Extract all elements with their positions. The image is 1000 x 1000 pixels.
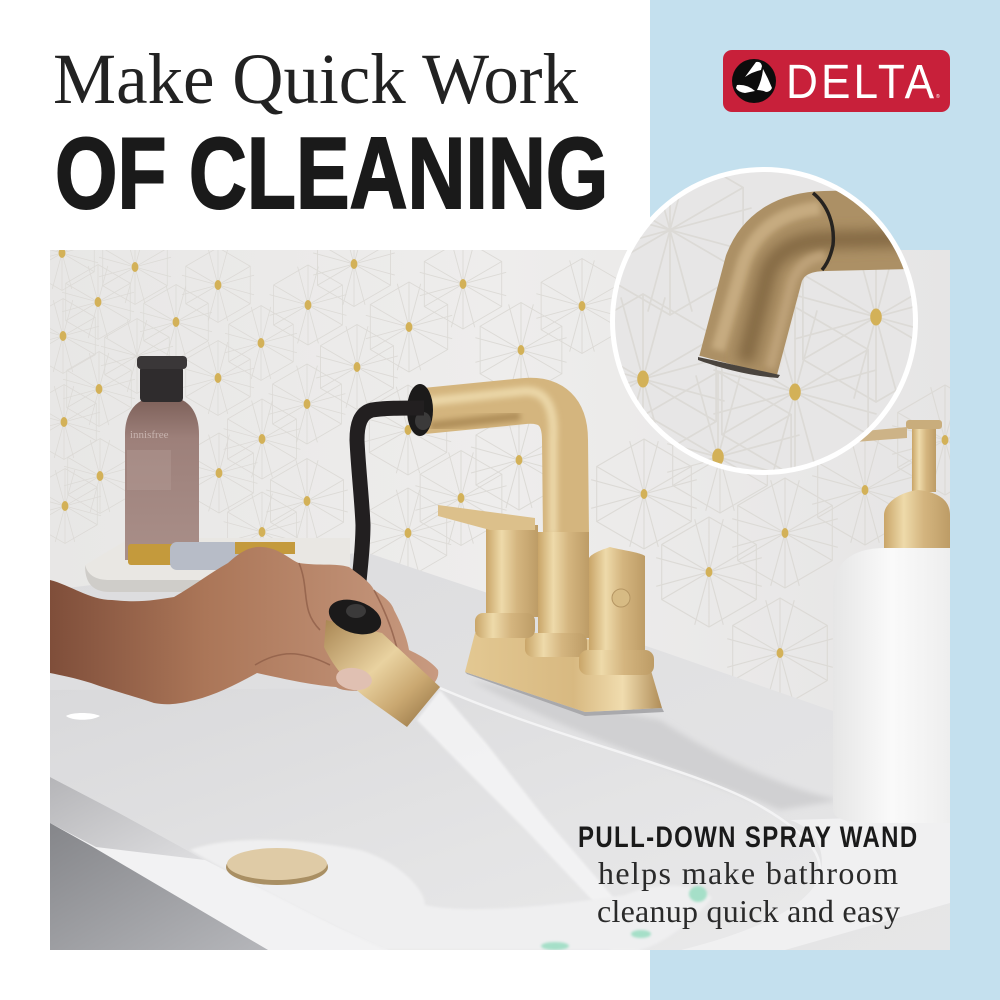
faucet spout — [407, 384, 566, 535]
title line 1: Make Quick Work — [53, 39, 578, 119]
brand logo — [723, 50, 950, 112]
front right counter — [681, 815, 950, 950]
base plate — [465, 633, 662, 712]
green soap tints — [541, 886, 707, 950]
pump spout — [860, 427, 907, 442]
magnified spout — [698, 193, 910, 378]
front left rim — [58, 828, 384, 950]
countertop and sink — [50, 552, 950, 950]
left handle column — [486, 525, 538, 617]
basin wedge reflection — [50, 777, 205, 860]
basin interior — [50, 688, 820, 950]
bottle: innisfree — [130, 429, 169, 441]
drain cap — [227, 848, 327, 880]
fingernail — [336, 668, 372, 690]
logo wordmark: DELTA — [786, 54, 934, 108]
counter surface — [50, 552, 950, 950]
bottle — [125, 356, 199, 560]
left lever — [438, 505, 535, 530]
faucet base — [438, 505, 664, 716]
product photo — [50, 250, 950, 950]
counter front rim highlight — [440, 688, 820, 885]
hand — [50, 547, 438, 704]
right column — [589, 547, 645, 655]
circle contents — [561, 145, 958, 542]
registered mark: ® — [936, 93, 940, 100]
dispenser body — [833, 548, 950, 823]
pump stem — [912, 426, 936, 492]
foam — [190, 840, 712, 950]
caption: cleanup quick and easy — [597, 893, 900, 929]
title — [53, 39, 608, 230]
blue side panel — [650, 0, 1000, 1000]
sink drain and foam — [190, 840, 712, 950]
base shadow — [465, 672, 664, 716]
spout aerator — [698, 357, 780, 378]
sink highlight — [66, 713, 100, 720]
title line 2: OF CLEANING — [55, 117, 608, 230]
dark lower left front — [50, 823, 268, 950]
logo emblem — [732, 59, 776, 103]
pump collar — [884, 490, 950, 548]
tray — [85, 538, 350, 592]
pump cap — [906, 420, 942, 429]
right knob — [612, 589, 630, 607]
spray head — [324, 593, 440, 727]
finger creases — [255, 563, 400, 665]
faucet reflection on counter — [470, 680, 840, 810]
center column — [538, 532, 589, 638]
caption — [578, 819, 917, 929]
zoom detail circle — [561, 145, 958, 542]
pull-down hose — [357, 408, 424, 610]
water stream — [418, 691, 610, 899]
caption: PULL-DOWN SPRAY WAND — [578, 819, 917, 854]
soap dispenser — [833, 420, 950, 823]
drain rim — [226, 863, 328, 885]
spout seam — [813, 193, 833, 270]
cosmetics on tray — [128, 542, 295, 570]
caption: helps make bathroom — [598, 855, 898, 891]
tiled backsplash — [50, 250, 950, 711]
